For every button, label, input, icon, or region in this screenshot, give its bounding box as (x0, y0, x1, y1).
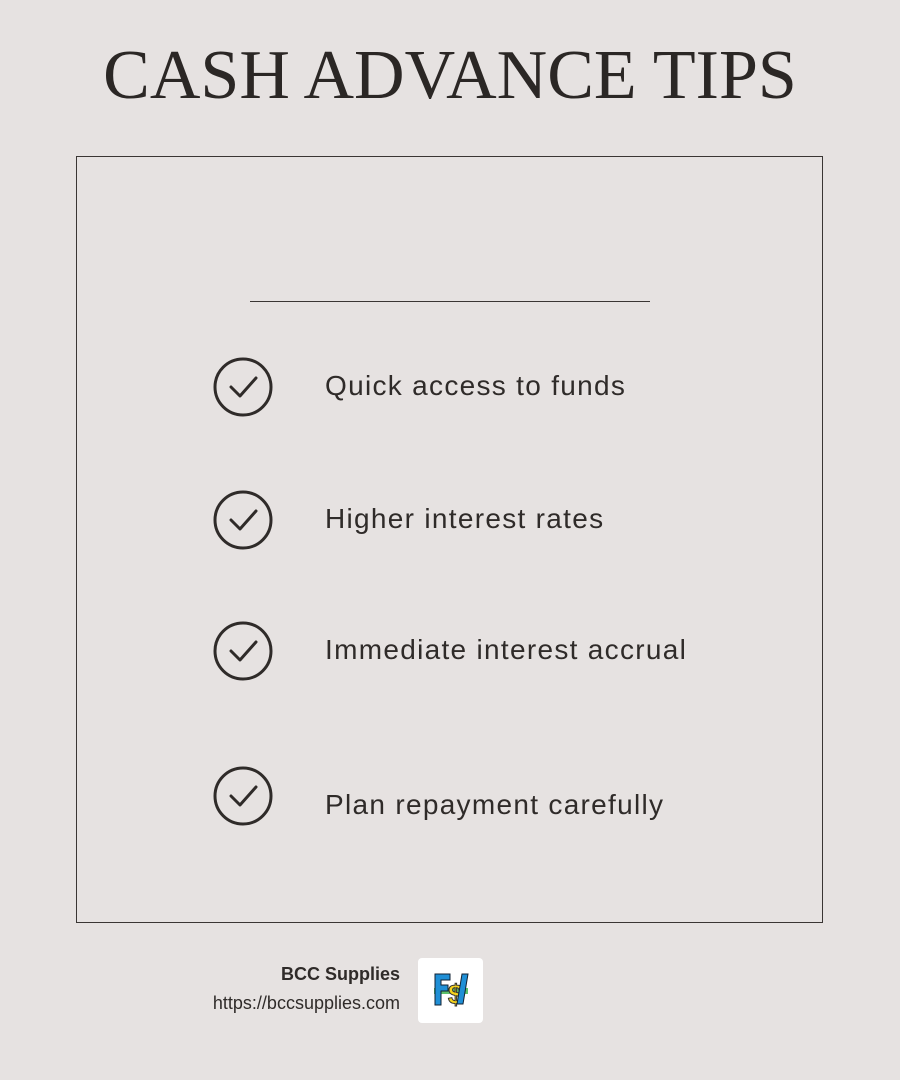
item: higher interest: Higher interest rates (325, 503, 604, 534)
item: plan repayment (214, 766, 664, 826)
item: immediate accrual (214, 622, 687, 680)
footer brand text: BCC Supplies (281, 964, 400, 984)
panel: tips box (76, 156, 823, 923)
title: CASH ADVANCE TIPS (103, 37, 797, 114)
item: higher interest (214, 490, 604, 550)
item: quick access: Quick access to funds (325, 370, 626, 401)
item: immediate accrual: Immediate interest accrual (325, 634, 687, 665)
divider line (250, 301, 650, 302)
logo (418, 958, 483, 1023)
logo: $ (448, 979, 464, 1010)
item: quick access (214, 358, 626, 416)
footer brand text: https://bccsupplies.com (213, 993, 400, 1013)
footer brand text (213, 964, 400, 1013)
item: plan repayment: Plan repayment carefully (325, 789, 664, 820)
